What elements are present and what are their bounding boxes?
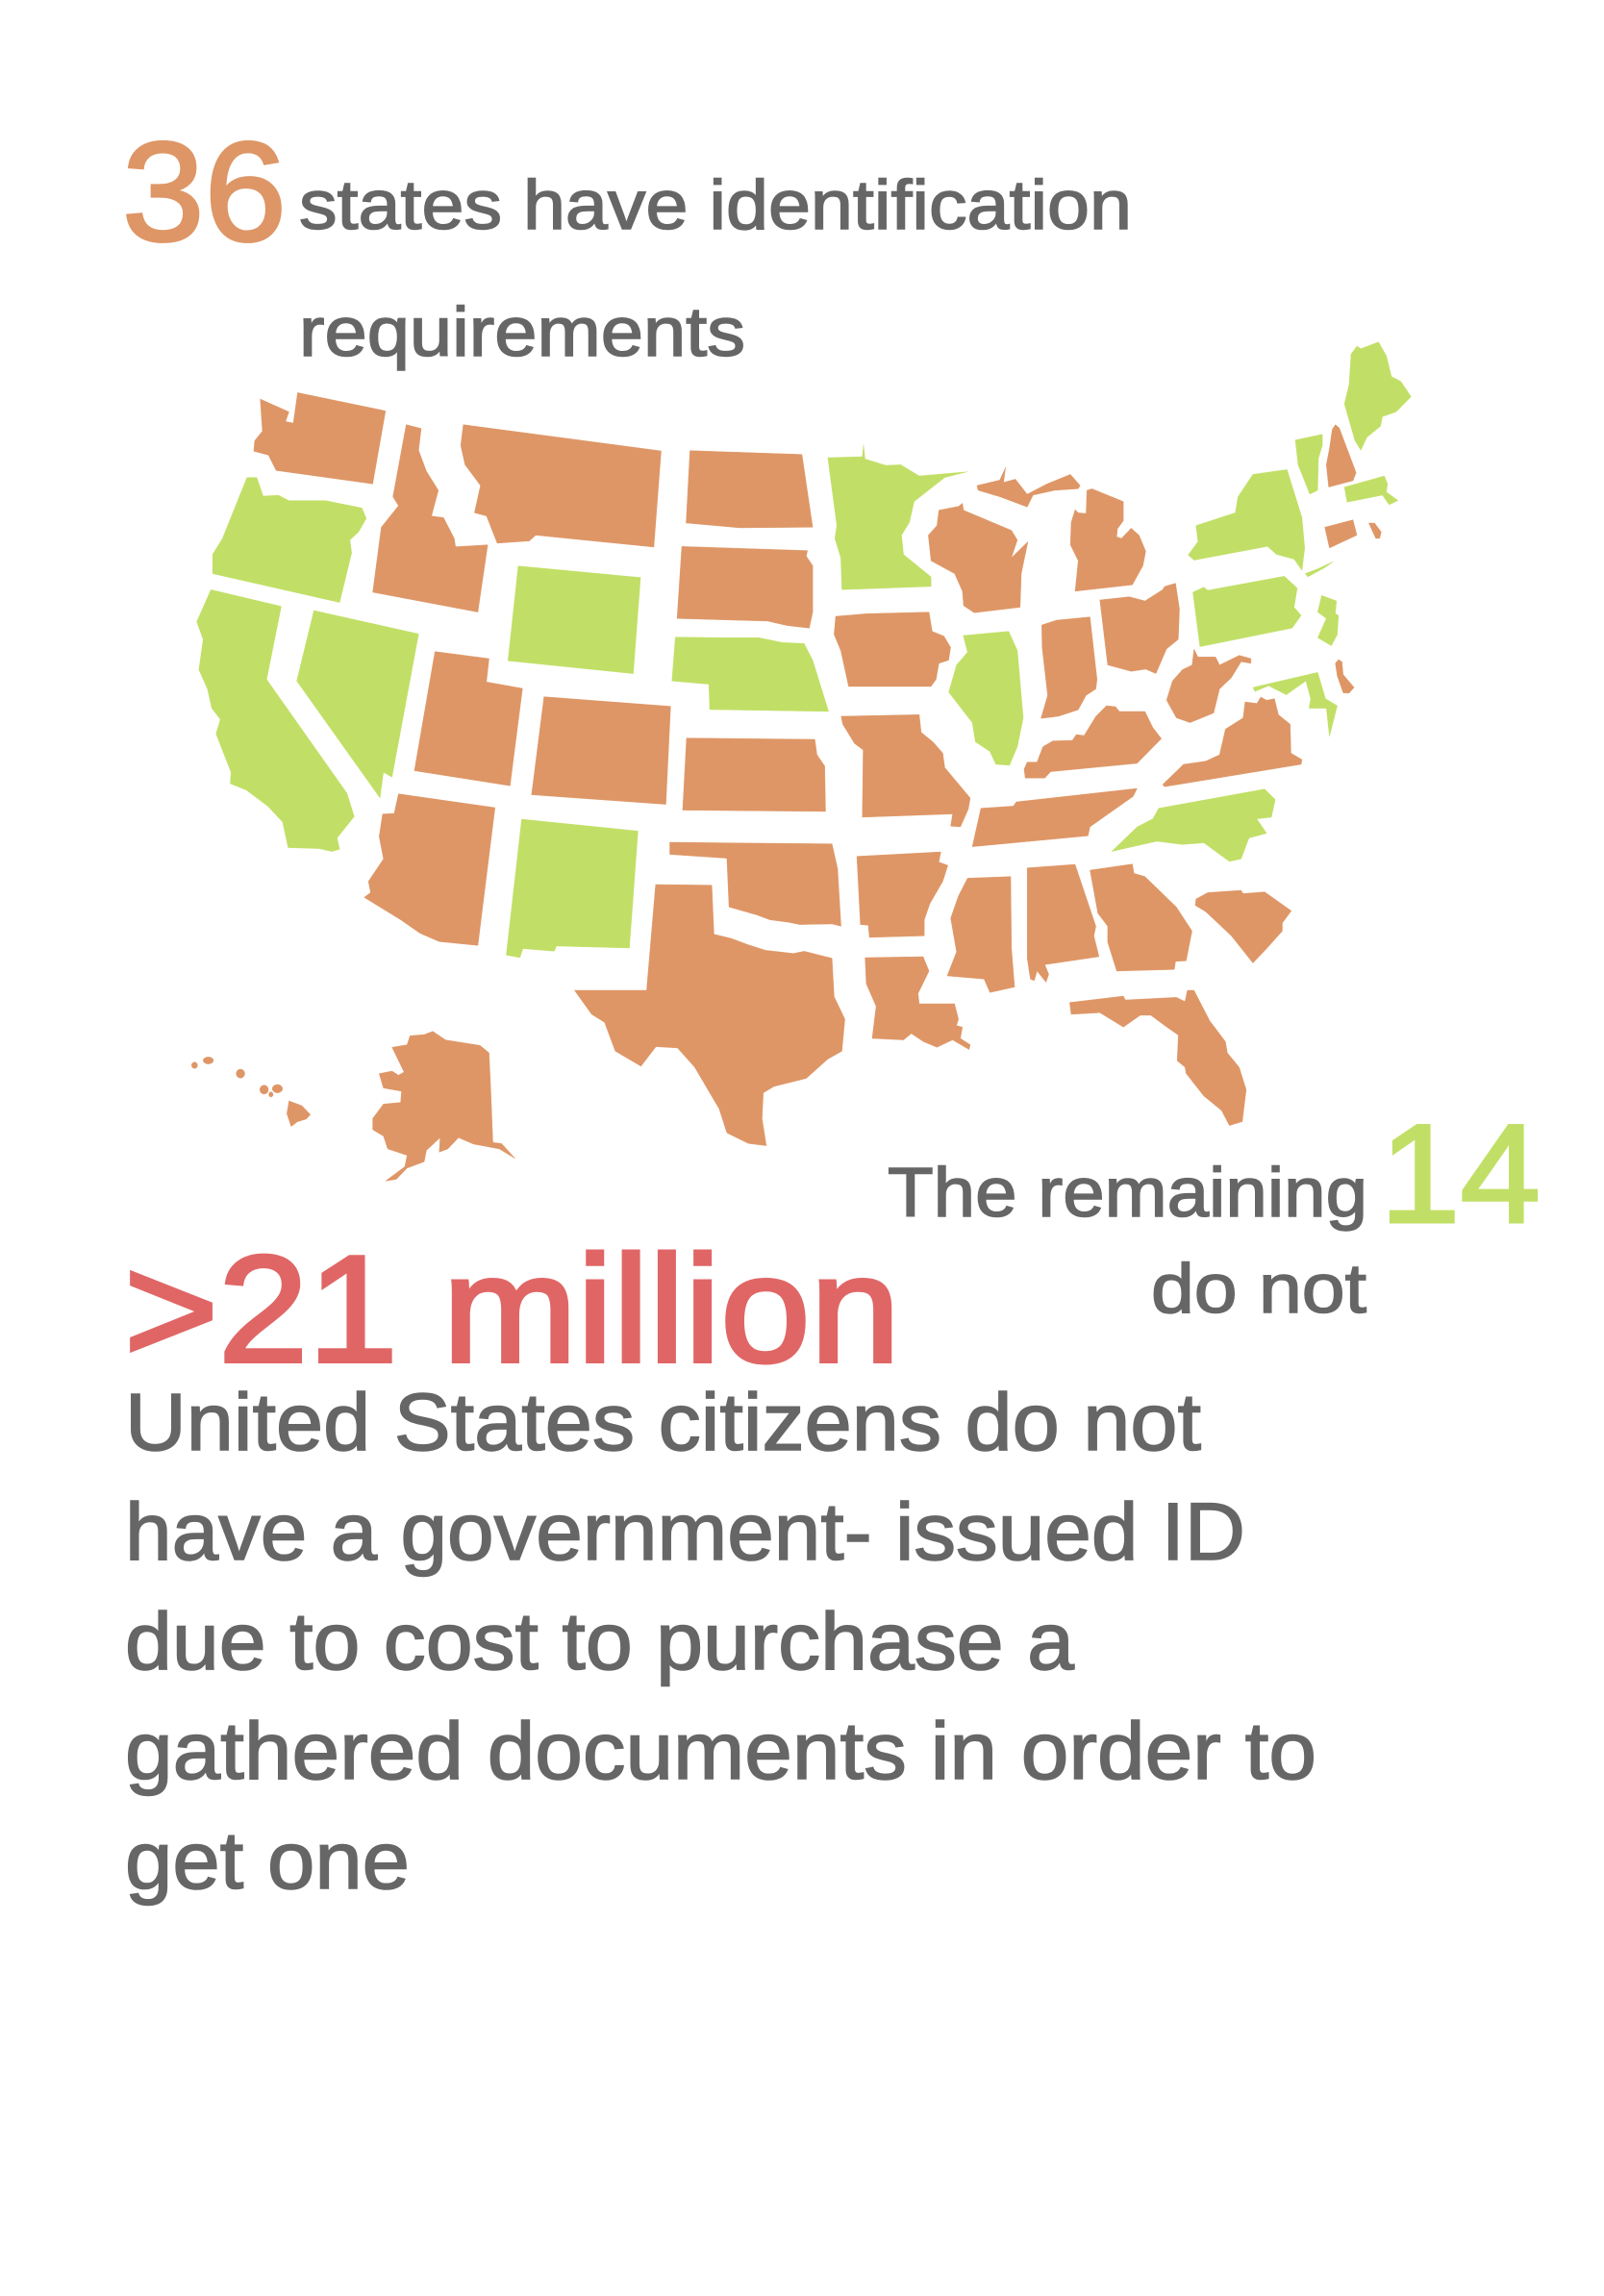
state: Kentucky <box>1024 706 1162 778</box>
state: New York <box>1189 469 1334 577</box>
state: California <box>197 589 354 852</box>
state: Iowa <box>834 612 951 686</box>
text block: citizens without government ID: have a government- issued ID <box>125 1486 1245 1577</box>
state: New Mexico <box>506 819 638 958</box>
state: Delaware <box>1336 660 1354 693</box>
statistic: 36 states: 36 <box>122 113 287 271</box>
state: New Hampshire <box>1326 425 1356 487</box>
state: Georgia <box>1090 864 1192 971</box>
state: Kansas <box>683 738 826 811</box>
state: Maryland <box>1253 672 1338 736</box>
state: Oregon <box>213 478 366 603</box>
state: Idaho <box>373 425 488 612</box>
heading: states have identification requirements: states have identification <box>299 167 1132 244</box>
state: Utah <box>414 652 522 786</box>
state: Nebraska <box>672 637 829 711</box>
statistic: more than 21 million: >21 million <box>124 1225 900 1394</box>
state: Michigan <box>977 467 1145 591</box>
map: United States by identification requirement <box>191 342 1411 1181</box>
state: Indiana <box>1040 617 1097 718</box>
text block: citizens without government ID: due to cost to purchase a <box>125 1596 1074 1686</box>
state: Mississippi <box>947 877 1015 992</box>
state: Rhode Island <box>1368 523 1381 538</box>
state: Wisconsin <box>928 503 1028 612</box>
statistic: 14 states: 14 <box>1380 1095 1541 1252</box>
state: Minnesota <box>828 445 967 589</box>
state: Hawaii <box>191 1057 311 1127</box>
text: The remaining do not <box>888 1155 1367 1328</box>
state: Ohio <box>1100 584 1180 674</box>
state: Alabama <box>1027 864 1099 983</box>
heading: states have identification requirements <box>299 167 1132 371</box>
heading: states have identification requirements: requirements <box>299 294 745 371</box>
text: The remaining do not: do not <box>1151 1251 1366 1328</box>
state: North Dakota <box>686 451 813 528</box>
state: Pennsylvania <box>1192 576 1301 647</box>
state: Illinois <box>949 632 1023 765</box>
state: Missouri <box>841 714 970 827</box>
state: Virginia <box>1163 697 1302 786</box>
text block: citizens without government ID: gathered documents in order to <box>125 1706 1316 1796</box>
state: Washington <box>254 392 386 484</box>
state: Tennessee <box>972 788 1137 847</box>
state: Maine <box>1344 342 1411 450</box>
text block: citizens without government ID: United States citizens do not <box>125 1377 1201 1467</box>
state: Montana <box>461 425 662 547</box>
text block: citizens without government ID <box>125 1377 1316 1906</box>
state: New Jersey <box>1317 595 1339 646</box>
state: Massachusetts <box>1344 476 1398 505</box>
state: West Virginia <box>1166 649 1251 723</box>
state: Alaska <box>373 1032 515 1181</box>
state: Colorado <box>532 697 670 805</box>
text block: citizens without government ID: get one <box>125 1815 410 1906</box>
state: Texas <box>574 885 845 1146</box>
state: Arizona <box>364 794 495 945</box>
text: The remaining do not: The remaining <box>888 1155 1367 1232</box>
state: Nevada <box>297 611 418 798</box>
state: Louisiana <box>865 957 970 1050</box>
state: Connecticut <box>1325 520 1357 548</box>
state: North Carolina <box>1112 789 1275 861</box>
state: Oklahoma <box>669 842 841 926</box>
state: Florida <box>1069 990 1246 1126</box>
state: Arkansas <box>857 852 948 937</box>
state: South Dakota <box>677 546 813 628</box>
state: South Carolina <box>1195 890 1291 963</box>
state: Vermont <box>1295 435 1322 494</box>
state: Wyoming <box>508 566 640 674</box>
